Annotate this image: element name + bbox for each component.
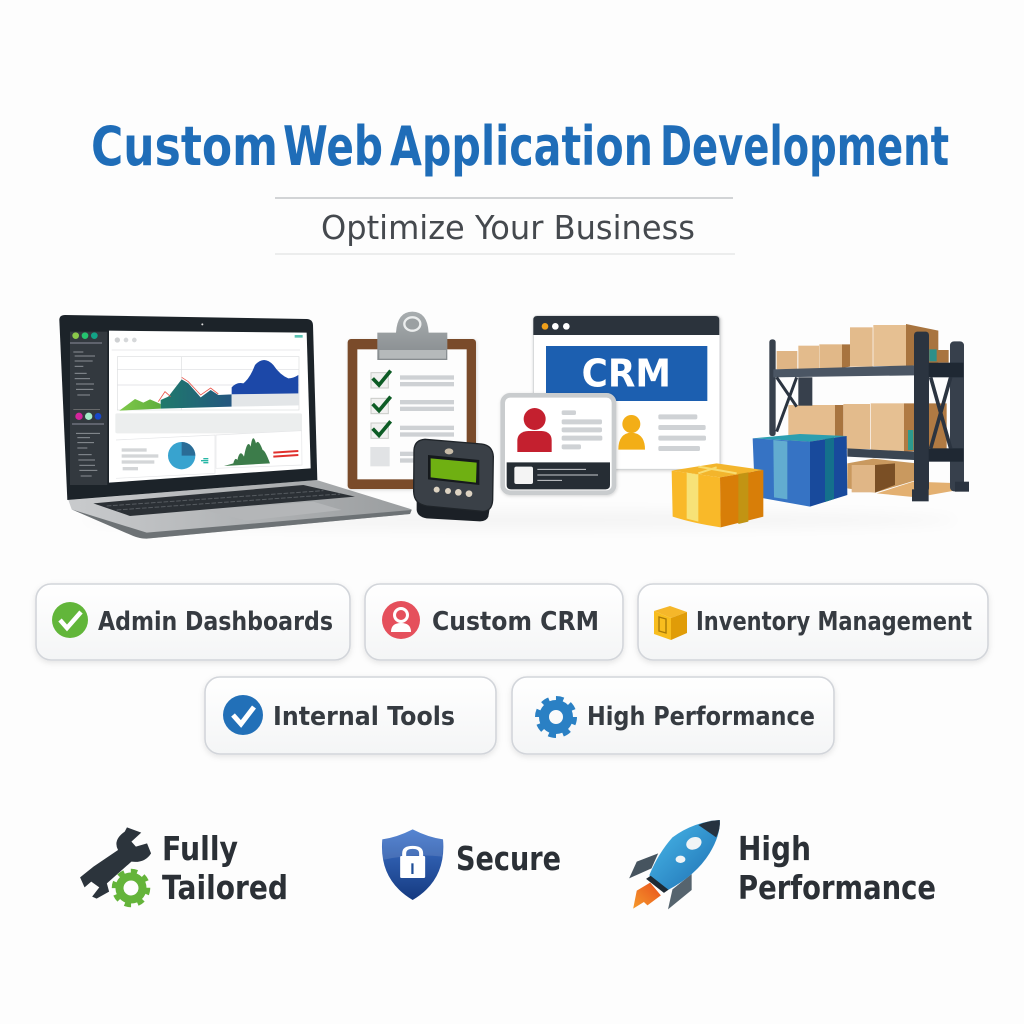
feature chip: Admin Dashboards [36,584,350,660]
contact: yellow person [618,415,645,450]
feature chip: Internal Tools: Internal Tools [273,702,455,732]
pie panel [116,435,215,478]
benefit: High Performance: High [738,829,811,868]
hero illustration [59,312,969,539]
benefit: Secure [382,829,561,900]
yellow box [672,463,763,527]
icon: laptop with dashboard [59,315,412,539]
benefit: Secure: Secure [456,839,561,878]
feature chip: High Performance [512,677,834,754]
shelf frame [769,332,969,501]
title [91,115,949,178]
icon: warehouse shelf with boxes [672,324,969,527]
benefit: Fully Tailored [80,827,288,907]
icon: yellow box [654,606,687,640]
feature chip: Inventory Management: Inventory Management [696,607,972,637]
feature chip: Custom CRM: Custom CRM [432,607,599,637]
icon: wrench and gear [80,827,151,899]
feature chip: High Performance: High Performance [587,702,815,732]
box on bottom shelf and pallet [847,459,963,497]
CRM label: CRM [582,351,671,396]
benefit: High Performance [629,820,936,909]
icon: CRM window [533,316,720,469]
icon: contact card [503,395,614,493]
icon: red user [382,601,420,639]
icon: clipboard checklist [348,312,476,489]
feature chip: Internal Tools [205,677,496,754]
boxes on middle shelf [788,403,947,452]
subtitle: Optimize Your Business [321,208,695,247]
icon: rocket [629,820,720,909]
boxes on top shelf [777,324,949,369]
feature chip: Custom CRM [365,584,623,660]
check rows [370,371,454,466]
title: Application [390,115,653,178]
icon: blue check [223,695,263,735]
sidebar [70,332,104,476]
icon: shield with lock [382,829,443,900]
dashboard top bar [115,337,120,343]
blue box [753,434,847,507]
benefit: Fully Tailored: Fully [162,829,238,868]
icon: green check [52,602,88,638]
area chart [117,357,299,411]
icon: handheld device [414,439,493,521]
title: Custom [91,115,278,178]
laptop base [68,480,412,539]
clip [377,312,447,360]
icon: blue gear [538,698,574,736]
title: Web [283,115,383,178]
feature chip: Inventory Management [638,584,988,660]
benefit: Fully Tailored: Tailored [162,868,288,907]
benefit: High Performance: Performance [738,868,936,907]
bar panel [216,431,302,468]
feature chip: Admin Dashboards: Admin Dashboards [98,607,333,637]
